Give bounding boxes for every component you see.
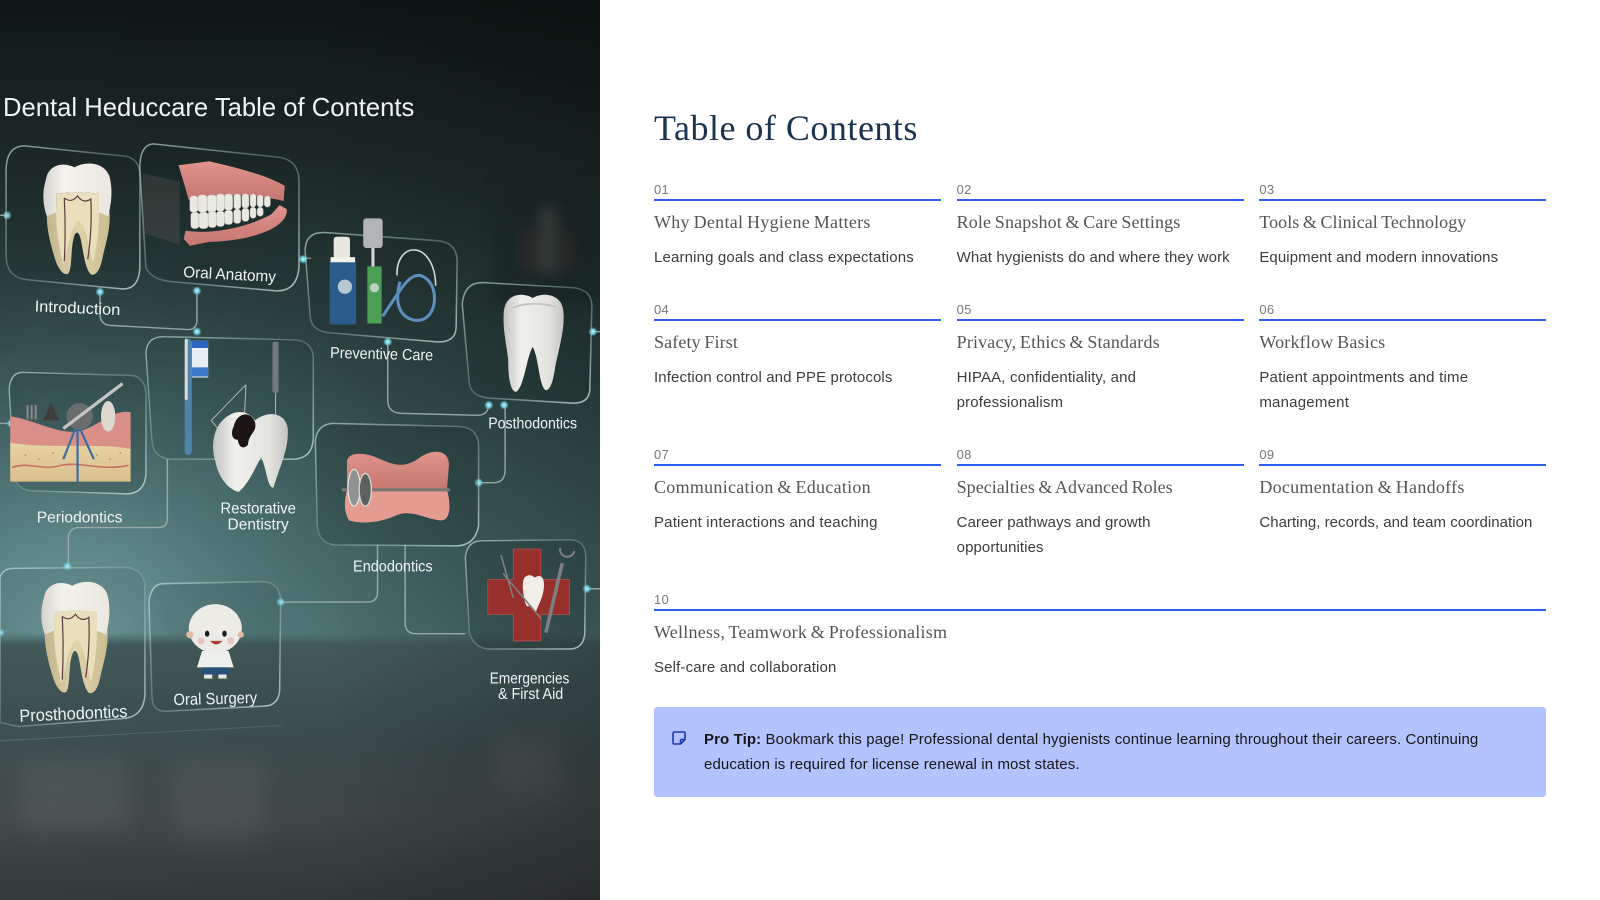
card: oral surgery [149,582,281,711]
label: Restorative Dentistry: Restorative [220,500,296,517]
icon: green toothbrush [363,218,383,323]
item 09: 09 [1259,447,1274,462]
item 01: Learning goals and class expectations [654,249,914,266]
item 06: management [1259,394,1349,411]
icon: red cross [488,549,569,641]
card: oral anatomy [140,144,299,291]
item 07: 07 [654,447,669,462]
item 03: 03 [1259,182,1274,197]
card: preventive care [305,218,457,365]
item 05 [957,302,1244,411]
label: Oral Surgery: Oral Surgery [173,689,258,709]
icon: white tooth [504,295,564,392]
item 04 [654,302,941,386]
pro tip text: Pro Tip: Bookmark this page! Professional dental hygienists continue learning throughout their careers. Continuing [704,731,1478,748]
item 08: opportunities [957,539,1044,556]
connector lines [0,215,600,634]
item 08: 08 [957,447,972,462]
connector nodes [0,211,597,637]
item 03 [1259,182,1546,266]
item 06: Patient appointments and time [1259,369,1468,386]
label: Oral Anatomy: Oral Anatomy [183,264,276,286]
icon: dental tools [501,548,574,633]
item 06: 06 [1259,302,1274,317]
item 07 [654,447,941,531]
card: periodontics [9,372,146,526]
image heading: Dental Heduccare Table of Contents [3,92,414,122]
item 10: Self-care and collaboration [654,659,836,676]
item 05: Privacy, Ethics & Standards [957,332,1160,352]
icon: broken tooth [523,575,544,612]
item 08: Career pathways and growth [957,514,1151,531]
label: Restorative Dentistry: Dentistry [228,517,289,534]
item 06 [1259,302,1546,411]
panel: dental illustration [0,0,600,900]
label: Emergencies & First Aid: Emergencies [490,671,569,688]
card: prosthodontics [0,567,145,727]
label: Emergencies & First Aid: & First Aid [498,686,563,703]
item 09: Charting, records, and team coordination [1259,514,1532,531]
card: endodontics [315,423,479,575]
icon: blue bottle [330,237,356,324]
label: Endodontics: Endodontics [353,558,433,575]
item 10: Wellness, Teamwork & Professionalism [654,622,947,642]
card: posthodontics [462,283,592,433]
item 07: Communication & Education [654,477,871,497]
icon: gum cross-section and tools [10,384,131,482]
floor [0,633,600,900]
pro tip text: education is required for license renewal in most states. [704,756,1080,773]
item 10 [654,592,1546,676]
item 04: Safety First [654,332,738,352]
item 01 [654,182,941,266]
icon: braces model [342,452,450,523]
item 06: Workflow Basics [1259,332,1385,352]
item 03: Equipment and modern innovations [1259,249,1498,266]
item 09 [1259,447,1546,531]
item 08 [957,447,1244,556]
item 07: Patient interactions and teaching [654,514,878,531]
icon: dentures [179,161,287,246]
item 09: Documentation & Handoffs [1259,477,1465,497]
icon: dental probe [211,342,279,437]
blurred background card [494,182,606,302]
icon: floss loop [383,250,436,320]
item 04: 04 [654,302,669,317]
icon: tooth mascot [186,604,244,679]
card: restorative dentistry [146,337,313,534]
item 02: 02 [957,182,972,197]
item 05: professionalism [957,394,1063,411]
item 10: 10 [654,592,669,607]
label: Prosthodontics: Prosthodontics [19,701,128,726]
card: emergencies [465,540,586,703]
label: Introduction: Introduction [34,298,121,319]
item 01: 01 [654,182,669,197]
item 01: Why Dental Hygiene Matters [654,212,871,232]
item 05: HIPAA, confidentiality, and [957,369,1136,386]
card: introduction [6,146,140,319]
icon: tooth cross-section [41,582,109,693]
item 04: Infection control and PPE protocols [654,369,893,386]
icon: tooth cross-section [43,163,111,275]
pro tip text [704,731,1478,773]
label: Posthodontics: Posthodontics [488,416,577,433]
item 02: Role Snapshot & Care Settings [957,212,1180,232]
item 08: Specialties & Advanced Roles [957,477,1173,497]
item 02 [956,182,1244,266]
icon: blue toothbrush [185,339,208,455]
item 02: What hygienists do and where they work [957,249,1230,266]
icon: decayed tooth [213,412,288,492]
label: Periodontics: Periodontics [37,509,123,526]
label: Preventive Care: Preventive Care [330,345,434,365]
callout: pro tip [654,707,1546,797]
item 03: Tools & Clinical Technology [1259,212,1466,232]
item 05: 05 [957,302,972,317]
title: Table of Contents [654,108,918,148]
icon: sticky note [672,731,686,745]
